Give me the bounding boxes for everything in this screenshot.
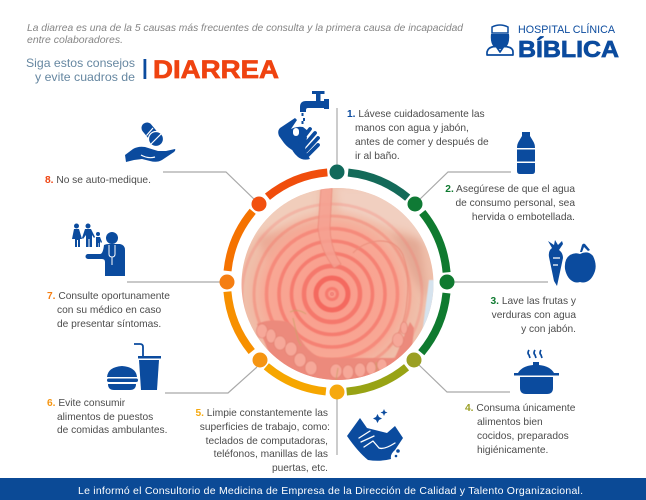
step 8 text: 8. No se auto-medique. — [45, 175, 151, 186]
redness glow — [256, 213, 407, 358]
step 4 text: cocidos, preparados — [477, 431, 569, 442]
icon: wiping hand — [347, 409, 403, 461]
step 5 text: 5. Limpie constantemente las — [195, 408, 328, 419]
central illustration: digestive system — [240, 186, 436, 384]
step 4 text: alimentos bien — [477, 417, 543, 428]
ring: colored segments — [182, 127, 492, 437]
concentric rings — [242, 202, 424, 358]
step 7 text: de presentar síntomas. — [57, 319, 161, 330]
connector lines — [127, 108, 548, 455]
step 4 text: 4. Consuma únicamente — [465, 403, 576, 414]
ring: step dots — [220, 164, 454, 400]
step 5 text: teclados de computadoras, — [206, 436, 328, 447]
step 2 text: de consumo personal, sea — [456, 198, 575, 209]
intro text: La diarrea es una de la 5 causas más frecuentes de consulta y la primera causa de incapacidad — [27, 22, 464, 34]
step 5 text: superficies de trabajo, como: — [200, 422, 330, 433]
step 2 text: 2. Asegúrese de que el agua — [445, 184, 575, 195]
step 7 text: con su médico en caso — [57, 305, 162, 316]
step 3 text: 3. Lave las frutas y — [490, 296, 577, 307]
title accent bar — [144, 59, 146, 79]
step 2 text: hervida o embotellada. — [472, 212, 575, 223]
footer text: Le informó el Consultorio de Medicina de Empresa de la Dirección de Calidad y Talento Organizacional. — [78, 485, 583, 497]
step 1 text: antes de comer y después de — [355, 137, 489, 148]
logo: Hospital Clínica Bíblica: HOSPITAL CLÍNICA — [518, 23, 616, 36]
icon: doctor and family — [72, 224, 125, 276]
step 1 text — [347, 109, 489, 162]
title: DIARREA: DIARREA — [153, 56, 279, 84]
step 4 text: higiénicamente. — [477, 445, 548, 456]
step 7 text: 7. Consulte oportunamente — [47, 291, 170, 302]
step 1 text: 1. Lávese cuidadosamente las — [347, 109, 485, 120]
step 6 text: alimentos de puestos — [57, 412, 153, 423]
intro text: entre colaboradores. — [27, 34, 123, 46]
step 3 text: verduras con agua — [492, 310, 576, 321]
step 6 text: 6. Evite consumir — [47, 398, 126, 409]
subtitle: y evite cuadros de — [35, 70, 135, 84]
step 1 text: manos con agua y jabón, — [355, 123, 469, 134]
icon: carrot and apple — [548, 240, 596, 286]
step 1 text: ir al baño. — [355, 151, 400, 162]
icon: cooking pot — [514, 350, 559, 394]
icon: tap and washing hands — [278, 91, 329, 160]
logo icon: nurse — [487, 25, 513, 55]
step 7 text — [47, 291, 170, 330]
step 6 text: de comidas ambulantes. — [57, 425, 167, 436]
stomach outline — [353, 241, 408, 348]
intestines — [256, 310, 414, 384]
subtitle — [26, 56, 135, 84]
step 3 text: y con jabón. — [521, 324, 576, 335]
step 3 text — [490, 296, 577, 335]
step 6 text — [47, 398, 167, 436]
logo: Hospital Clínica Bíblica: BÍBLICA — [518, 35, 619, 62]
icon: water bottle — [517, 132, 535, 174]
step 5 text: puertas, etc. — [272, 463, 328, 474]
step 5 text: teléfonos, manillas de las — [214, 449, 328, 460]
intro text — [27, 22, 464, 46]
logo: Hospital Clínica Bíblica — [487, 23, 619, 62]
icon: burger and drink — [107, 344, 161, 390]
esophagus — [318, 188, 341, 268]
step 2 text — [445, 184, 575, 223]
step 4 text — [465, 403, 576, 456]
subtitle: Siga estos consejos — [26, 56, 135, 70]
footer bar — [0, 478, 646, 500]
step 5 text — [195, 408, 330, 474]
icon: pills over hand — [125, 128, 175, 162]
